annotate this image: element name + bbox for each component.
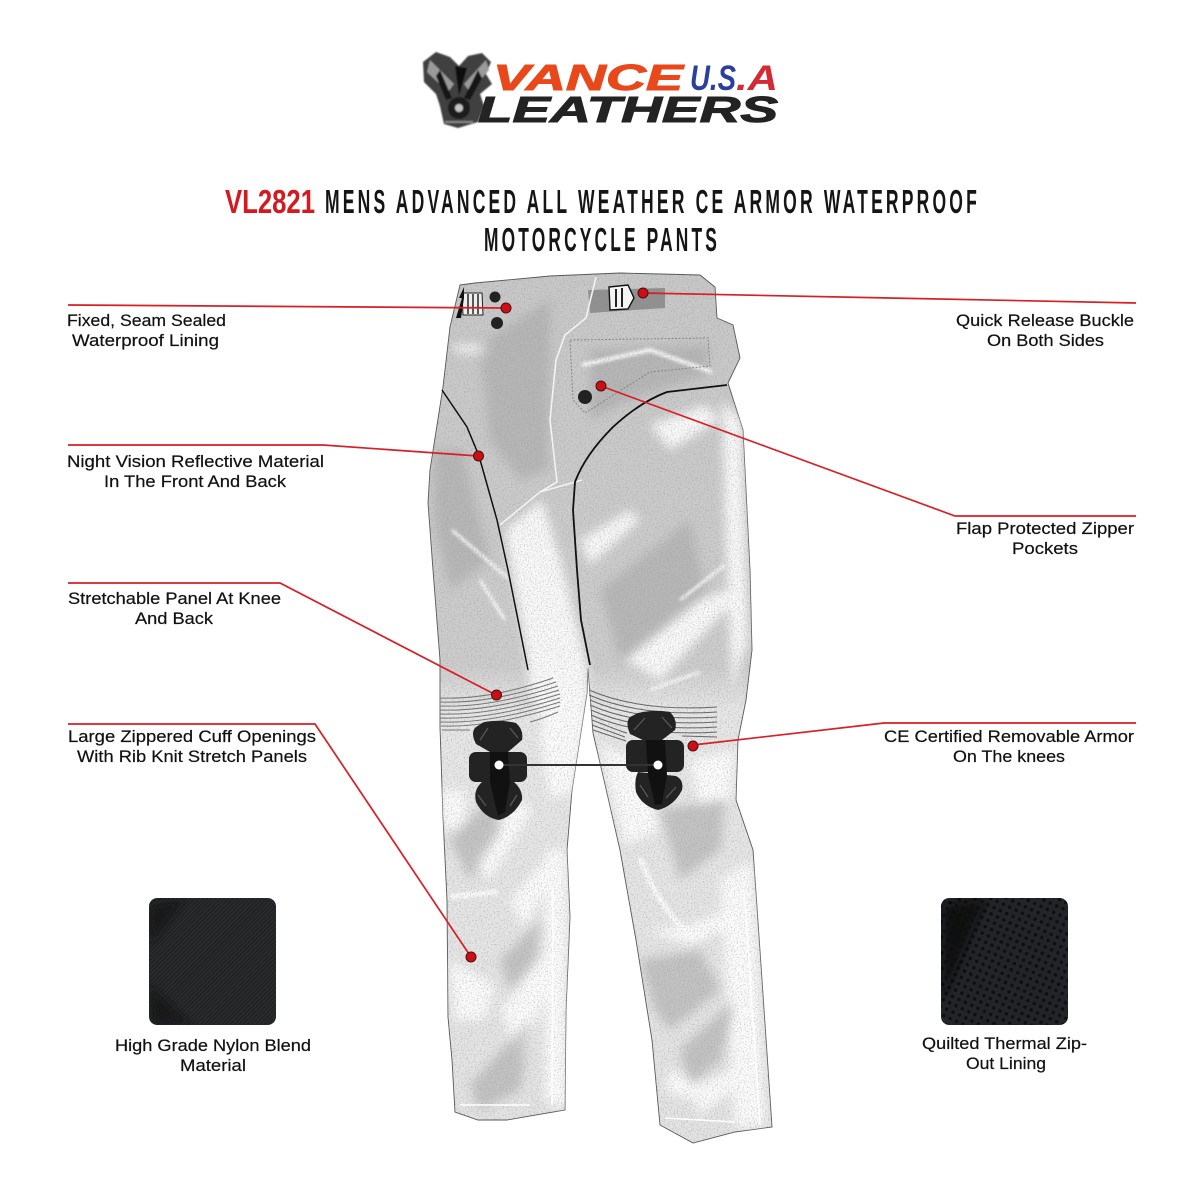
- wordmark USA: [690, 59, 778, 98]
- pocket flap: [570, 338, 710, 413]
- product image: motorcycle pants: [420, 270, 780, 1150]
- callout: stretchable panel: [68, 583, 502, 700]
- logo: Vance Leathers USA: [423, 52, 778, 130]
- label: [956, 312, 1134, 350]
- wordmark LEATHERS: LEATHERS: [478, 89, 778, 130]
- label: [956, 520, 1135, 558]
- fly and seam lines: [500, 277, 596, 525]
- knee armor, right: [626, 711, 684, 810]
- label: [922, 1035, 1087, 1073]
- label: High Grade Nylon Blend: [115, 1037, 311, 1055]
- waistband buckle, left: [456, 287, 483, 318]
- wordmark VANCE: VANCE: [493, 57, 685, 98]
- pants silhouette: [428, 273, 772, 1143]
- label: [115, 1037, 311, 1075]
- callout: night vision reflective material: [67, 445, 484, 491]
- label: On Both Sides: [987, 332, 1104, 350]
- callout: CE certified removable armor: [688, 723, 1136, 766]
- label: In The Front And Back: [104, 473, 287, 491]
- snap studs: [490, 292, 592, 404]
- label: On The knees: [953, 748, 1065, 766]
- label: Out Lining: [966, 1055, 1046, 1073]
- armor connector and markers: [494, 760, 662, 770]
- label: [67, 453, 324, 491]
- waistband strap and buckle, right: [588, 285, 665, 313]
- panel: quilted thermal lining: [922, 898, 1087, 1073]
- title: MOTORCYCLE PANTS: [484, 221, 720, 258]
- label: Waterproof Lining: [72, 332, 219, 350]
- knee armor, left: [469, 721, 527, 820]
- label: Quilted Thermal Zip-: [922, 1035, 1087, 1053]
- title: [225, 183, 980, 258]
- reflective piping, left: [442, 390, 528, 670]
- label: Pockets: [1012, 540, 1078, 558]
- label: Flap Protected Zipper: [956, 520, 1135, 538]
- label: Material: [180, 1057, 246, 1075]
- label: Fixed, Seam Sealed: [67, 312, 226, 330]
- label: [884, 728, 1135, 766]
- label: CE Certified Removable Armor: [884, 728, 1135, 746]
- label: Stretchable Panel At Knee: [68, 590, 281, 608]
- label: And Back: [135, 610, 214, 628]
- label: Large Zippered Cuff Openings: [68, 728, 316, 746]
- reflective piping, right: [573, 385, 727, 665]
- fabric folds and shading: [420, 270, 780, 1150]
- panel: nylon blend material: [115, 898, 311, 1075]
- wordmark USA: .A: [736, 59, 778, 98]
- callout: fixed seam sealed lining: [67, 303, 511, 350]
- label: Night Vision Reflective Material: [67, 453, 324, 471]
- knee stretch panel, right: [589, 690, 717, 741]
- label: [68, 590, 281, 628]
- swatch: nylon: [149, 898, 276, 1025]
- label: [67, 312, 226, 350]
- product code: VL2821: [225, 183, 315, 220]
- callout: flap protected zipper pockets: [596, 381, 1136, 558]
- callout: large zippered cuff openings: [68, 724, 476, 962]
- label: Quick Release Buckle: [956, 312, 1134, 330]
- callout: quick release buckle: [638, 288, 1136, 350]
- swatch: mesh: [941, 898, 1068, 1025]
- label: [68, 728, 316, 766]
- icon: V-twin engine: [423, 52, 492, 128]
- wordmark USA: U.S: [690, 59, 736, 98]
- knee stretch panel, left: [440, 678, 560, 730]
- label: With Rib Knit Stretch Panels: [77, 748, 307, 766]
